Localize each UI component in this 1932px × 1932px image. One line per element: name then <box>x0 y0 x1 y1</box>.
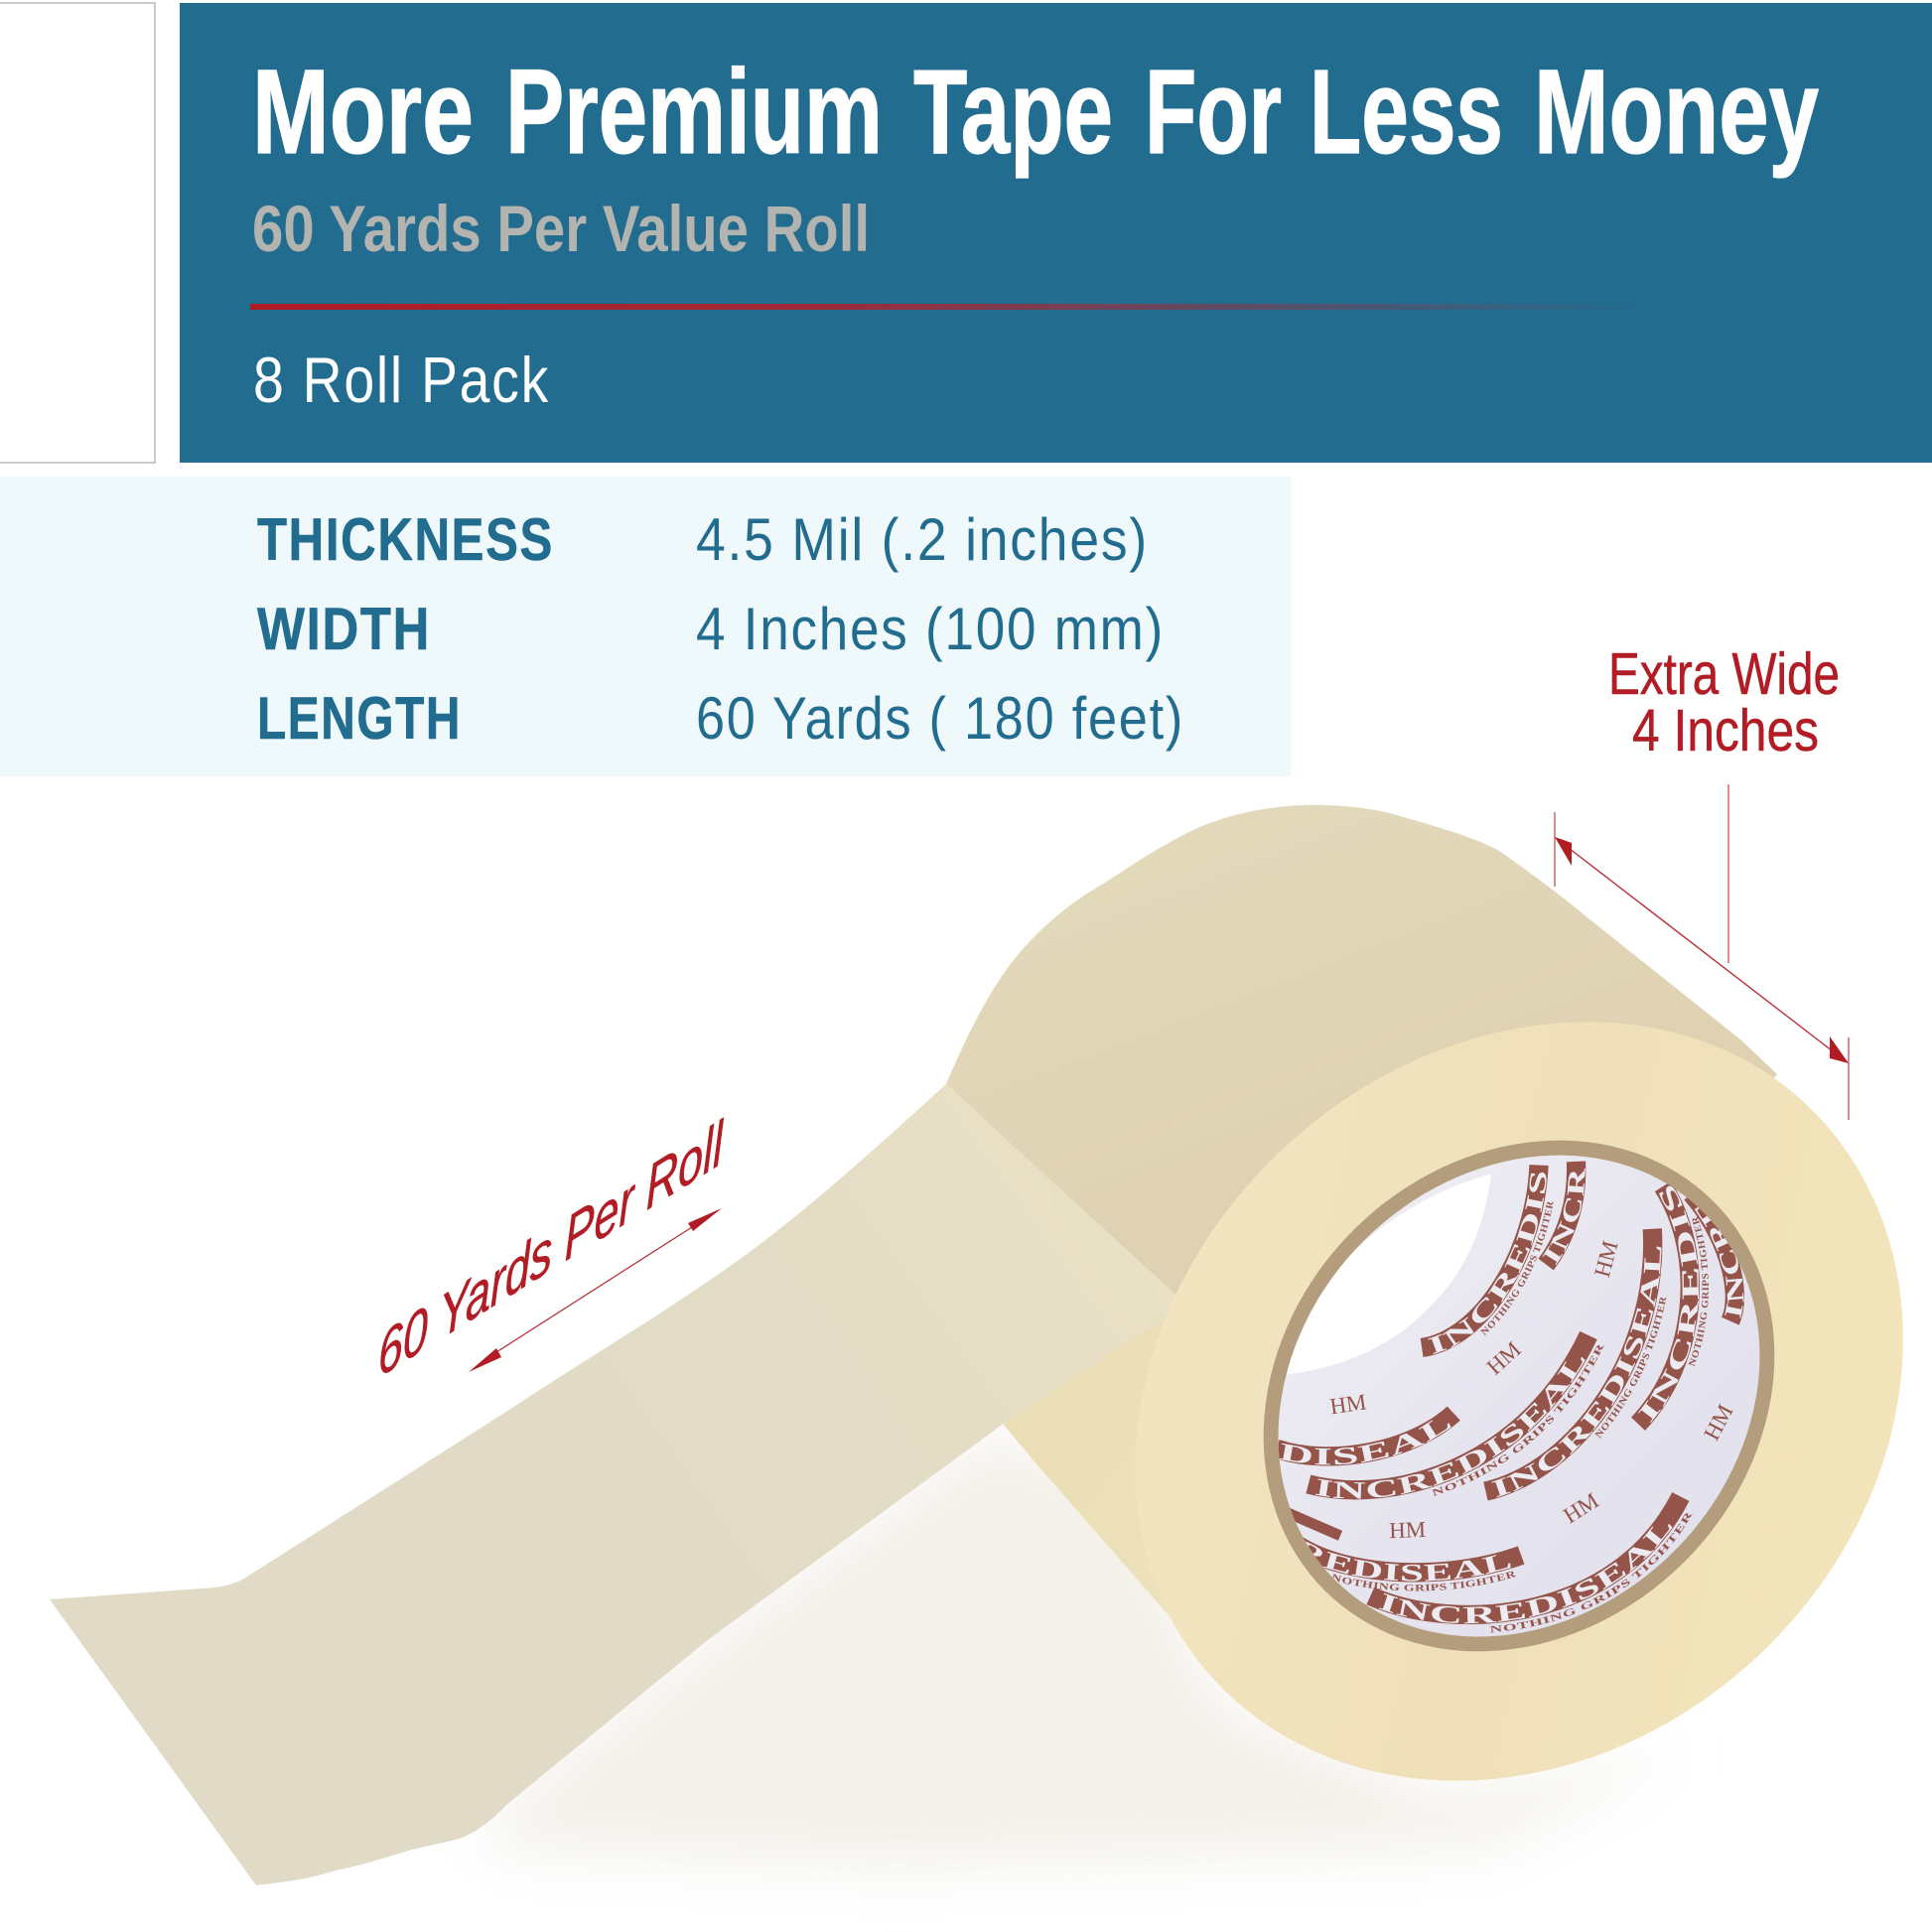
brand wordmarks <box>1279 1168 1744 1624</box>
spec value: thickness: 4.5 Mil (.2 inches) <box>696 506 1149 573</box>
roll underside <box>1003 1291 1291 1678</box>
brand taglines: NOTHING GRIPS TIGHTER <box>1480 1201 1554 1336</box>
brand wordmarks: INCREDISEAL <box>1314 1356 1586 1499</box>
HM marks: HM <box>1328 1389 1368 1419</box>
cardboard core ring <box>1159 1035 1879 1756</box>
roll end face <box>981 867 1932 1932</box>
see-through hole <box>1287 1173 1491 1374</box>
callout: extra wide 4 inches: 4 Inches <box>1632 698 1819 763</box>
spec label: thickness: THICKNESS <box>257 506 554 573</box>
HM marks: HM <box>1482 1336 1526 1380</box>
panel: specifications <box>0 477 1291 776</box>
floor shadow <box>477 1432 1688 1866</box>
HM marks: HM <box>1559 1488 1603 1528</box>
brand wordmarks: DISEAL <box>1279 1420 1451 1465</box>
brand wordmarks: INCREDIS <box>1428 1172 1547 1354</box>
title: Tape <box>913 44 1113 179</box>
brand taglines: NOTHING GRIPS TIGHTER <box>1332 1571 1517 1590</box>
subtitle: 60 Yards Per Value Roll <box>252 192 870 265</box>
roll body <box>946 805 1777 1390</box>
title: Premium <box>505 44 883 179</box>
spec label: length: LENGTH <box>257 685 462 752</box>
callout: extra wide 4 inches <box>1608 641 1840 763</box>
spec value: length: 60 Yards ( 180 feet) <box>696 685 1184 752</box>
HM marks: HM <box>1699 1400 1738 1445</box>
brand taglines <box>1332 1201 1709 1632</box>
title: For <box>1145 44 1282 179</box>
brand taglines: NOTHING GRIPS TIGHTER <box>1688 1216 1709 1367</box>
brand taglines: NOTHING GRIPS TIGHTER <box>1432 1345 1604 1496</box>
core interior with printed branding <box>1279 1156 1759 1636</box>
unrolled tape strip <box>50 1084 1186 1885</box>
width dimension arrow <box>1555 784 1849 1120</box>
title: Less <box>1310 44 1503 179</box>
HM marks <box>1328 1238 1738 1543</box>
title <box>252 44 1819 179</box>
spec value: width: 4 Inches (100 mm) <box>696 596 1165 662</box>
HM marks: HM <box>1389 1517 1426 1543</box>
panel: header banner <box>180 3 1932 463</box>
blank white box <box>0 3 155 463</box>
red gradient divider <box>250 304 1643 310</box>
title: More <box>252 44 474 179</box>
HM marks: HM <box>1589 1238 1623 1280</box>
brand bands <box>1277 1162 1734 1614</box>
icon: tape roll <box>50 804 1903 1885</box>
brand wordmarks: INCREDISEAL <box>1491 1247 1662 1497</box>
brand wordmarks: INCREDISEAL <box>1379 1523 1672 1624</box>
callout: extra wide 4 inches: Extra Wide <box>1608 641 1840 707</box>
brand wordmarks: REDISEAL <box>1305 1541 1511 1582</box>
spec label: width: WIDTH <box>257 596 431 662</box>
length dimension arrow <box>469 1208 722 1372</box>
brand wordmarks: INCREDIS <box>1638 1185 1700 1423</box>
brand taglines: NOTHING GRIPS TIGHTER <box>1594 1297 1666 1439</box>
title: Money <box>1534 44 1819 179</box>
pack size: 8 Roll Pack <box>253 344 550 416</box>
brand wordmarks: INCRE <box>1694 1207 1744 1318</box>
callout: 60 yards per roll: 60 Yards Per Roll <box>378 1107 724 1392</box>
brand taglines: NOTHING GRIPS TIGHTER <box>1489 1513 1692 1632</box>
brand wordmarks: INCR <box>1543 1168 1586 1265</box>
